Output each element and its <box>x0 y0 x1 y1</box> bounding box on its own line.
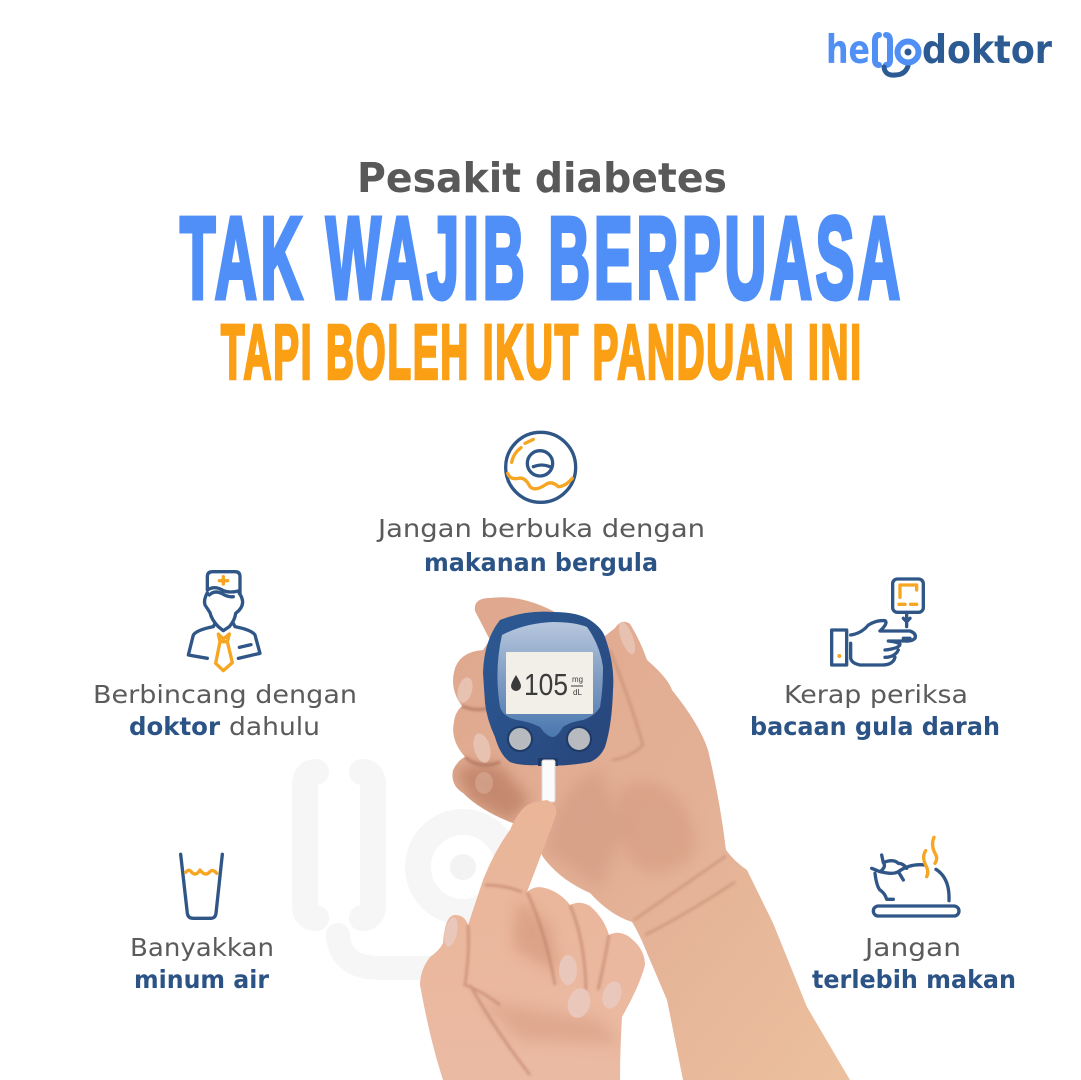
photo: hands holding glucose meter <box>420 597 850 1080</box>
fingernails upper hand <box>455 620 638 794</box>
label: makanan bergula: Jangan berbuka dengan <box>376 514 705 543</box>
meter reading: 105 <box>524 667 568 702</box>
label: bacaan gula darah: bacaan gula darah <box>750 712 1000 741</box>
label: bacaan gula darah <box>750 680 1000 741</box>
label: bacaan gula darah: Kerap periksa <box>784 680 968 709</box>
logo: hellodoktor: doktor <box>922 28 1053 73</box>
upper hand and arm <box>452 597 850 1080</box>
subtitle: TAPI BOLEH IKUT PANDUAN INI: TAPI BOLEH IKUT PANDUAN INI <box>221 309 861 395</box>
icon: glass of water <box>181 854 222 918</box>
icon: finger and glucose meter <box>832 579 923 665</box>
meter reading: mg <box>572 675 583 684</box>
heading: Pesakit diabetes: Pesakit diabetes <box>357 154 727 202</box>
icon: doctor <box>188 572 260 671</box>
watermark: logo stethoscope <box>305 772 508 968</box>
glucose meter <box>483 612 613 802</box>
fingernails lower hand <box>442 916 625 1020</box>
icon: roast chicken <box>872 837 959 916</box>
label: terlebih makan: Jangan <box>863 933 961 962</box>
label: makanan bergula <box>376 514 705 577</box>
label: doktor dahulu <box>93 680 357 741</box>
meter reading: dL <box>573 688 583 697</box>
lower hand <box>420 800 645 1080</box>
label: doktor dahulu: dahulu <box>229 712 320 741</box>
label: minum air: minum air <box>134 965 270 994</box>
label: makanan bergula: makanan bergula <box>424 548 658 577</box>
label: terlebih makan: terlebih makan <box>812 965 1016 994</box>
label: terlebih makan <box>812 933 1016 994</box>
label: doktor dahulu: Berbincang dengan <box>93 680 357 709</box>
label: minum air: Banyakkan <box>130 933 274 962</box>
title: TAK WAJIB BERPUASA: TAK WAJIB BERPUASA <box>180 194 900 323</box>
label: minum air <box>130 933 274 994</box>
icon: donut <box>506 432 576 502</box>
logo: hellodoktor <box>826 28 1053 75</box>
logo: hellodoktor: he <box>826 28 870 73</box>
label: doktor dahulu: doktor <box>129 712 221 741</box>
